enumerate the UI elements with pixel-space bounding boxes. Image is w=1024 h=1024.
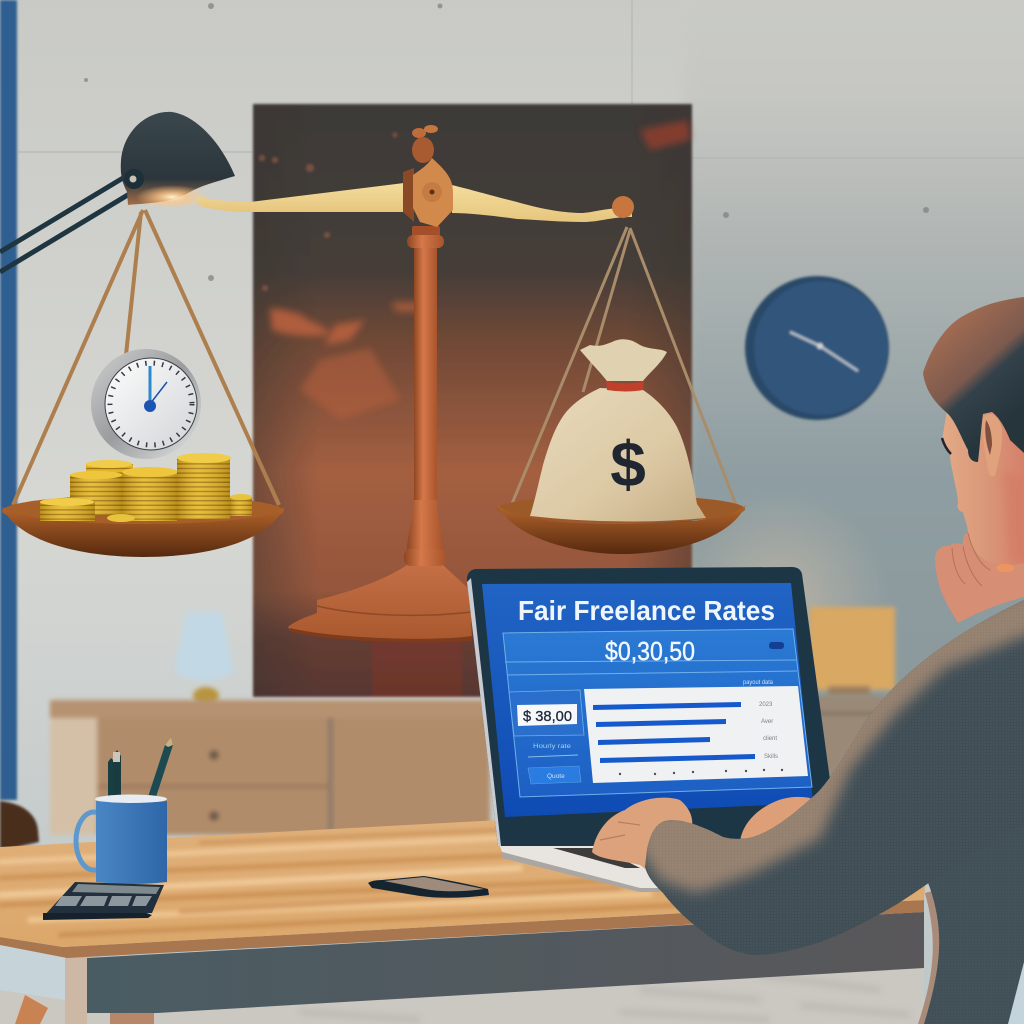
sleeve and arm	[640, 585, 1024, 960]
person	[592, 297, 1024, 1024]
laptop	[467, 567, 830, 892]
lamp arms	[0, 172, 136, 272]
scale beam	[196, 183, 632, 222]
mug body	[76, 794, 167, 884]
wooden cabinet	[50, 696, 885, 835]
bar labels: Skills	[764, 754, 778, 760]
pens	[108, 737, 173, 800]
sidebar button: Quote	[547, 773, 565, 780]
desk apron	[87, 912, 924, 1013]
desk edge	[0, 900, 924, 958]
left ropes	[13, 210, 279, 505]
lamp glow	[136, 185, 208, 209]
left sidebar	[509, 690, 584, 784]
right pan dish	[497, 495, 746, 554]
wall painting	[253, 104, 692, 697]
torso	[880, 700, 1024, 1024]
smartphone	[368, 876, 489, 898]
right ropes	[511, 227, 736, 506]
head	[923, 297, 1024, 565]
left pan dish	[2, 495, 285, 557]
bar 4	[600, 754, 755, 763]
far hand on keyboard	[740, 797, 825, 842]
desk	[0, 820, 930, 1024]
left sidebar: Hourly rate	[533, 743, 571, 750]
clock on left pan	[91, 349, 201, 459]
bar labels	[759, 702, 778, 760]
eye	[942, 438, 951, 454]
axis ticks	[619, 769, 783, 775]
rate dashboard panel	[503, 629, 812, 797]
calculator	[43, 882, 164, 920]
screen title: Fair Freelance Rates	[518, 595, 775, 626]
dollar sign on bag: $	[610, 428, 646, 500]
balance scale	[2, 125, 746, 642]
scale post	[404, 226, 446, 566]
bar 1	[593, 702, 741, 710]
lamp joint	[124, 169, 144, 189]
lamp shade	[121, 112, 235, 205]
table lamp in background, left	[174, 612, 234, 705]
near hand on keyboard	[592, 798, 692, 880]
wall clock	[745, 276, 889, 420]
headline rate figure: $0,30,50	[605, 636, 695, 666]
small panel label: payout data	[743, 679, 773, 686]
floor	[0, 937, 924, 1024]
coin stacks	[40, 453, 252, 522]
laptop screen	[482, 583, 813, 817]
desk lamp	[0, 112, 235, 272]
bar labels: client	[763, 736, 777, 742]
scale base	[288, 565, 472, 642]
bar 3	[598, 737, 710, 745]
sidebar price box: $ 38,00	[523, 708, 572, 725]
bar labels: Aver	[761, 719, 773, 725]
desk top	[0, 820, 930, 947]
desk legs	[15, 955, 154, 1024]
bar labels: 2023	[759, 702, 773, 708]
bar chart	[584, 686, 808, 783]
laptop base	[500, 846, 700, 892]
small badge	[769, 642, 784, 649]
chin hand	[935, 533, 1024, 623]
shirt at bottom	[1008, 962, 1024, 1024]
hair	[923, 297, 1024, 462]
left pan with clock and coins	[2, 210, 285, 557]
stool edge	[0, 801, 39, 851]
scale finial and pivot	[403, 125, 453, 227]
blue curtain strip	[0, 0, 17, 800]
laptop lid	[467, 567, 830, 846]
mug with pens	[76, 737, 173, 884]
right beam knob	[612, 196, 634, 218]
face and neck	[942, 400, 1024, 565]
right pan with money bag	[497, 227, 746, 554]
ear	[982, 414, 1002, 477]
money bag	[530, 339, 706, 522]
sleeve light	[640, 585, 1024, 893]
bar 2	[596, 719, 726, 727]
table lamp in background, right	[808, 607, 895, 696]
jaw shadow	[1002, 470, 1024, 560]
